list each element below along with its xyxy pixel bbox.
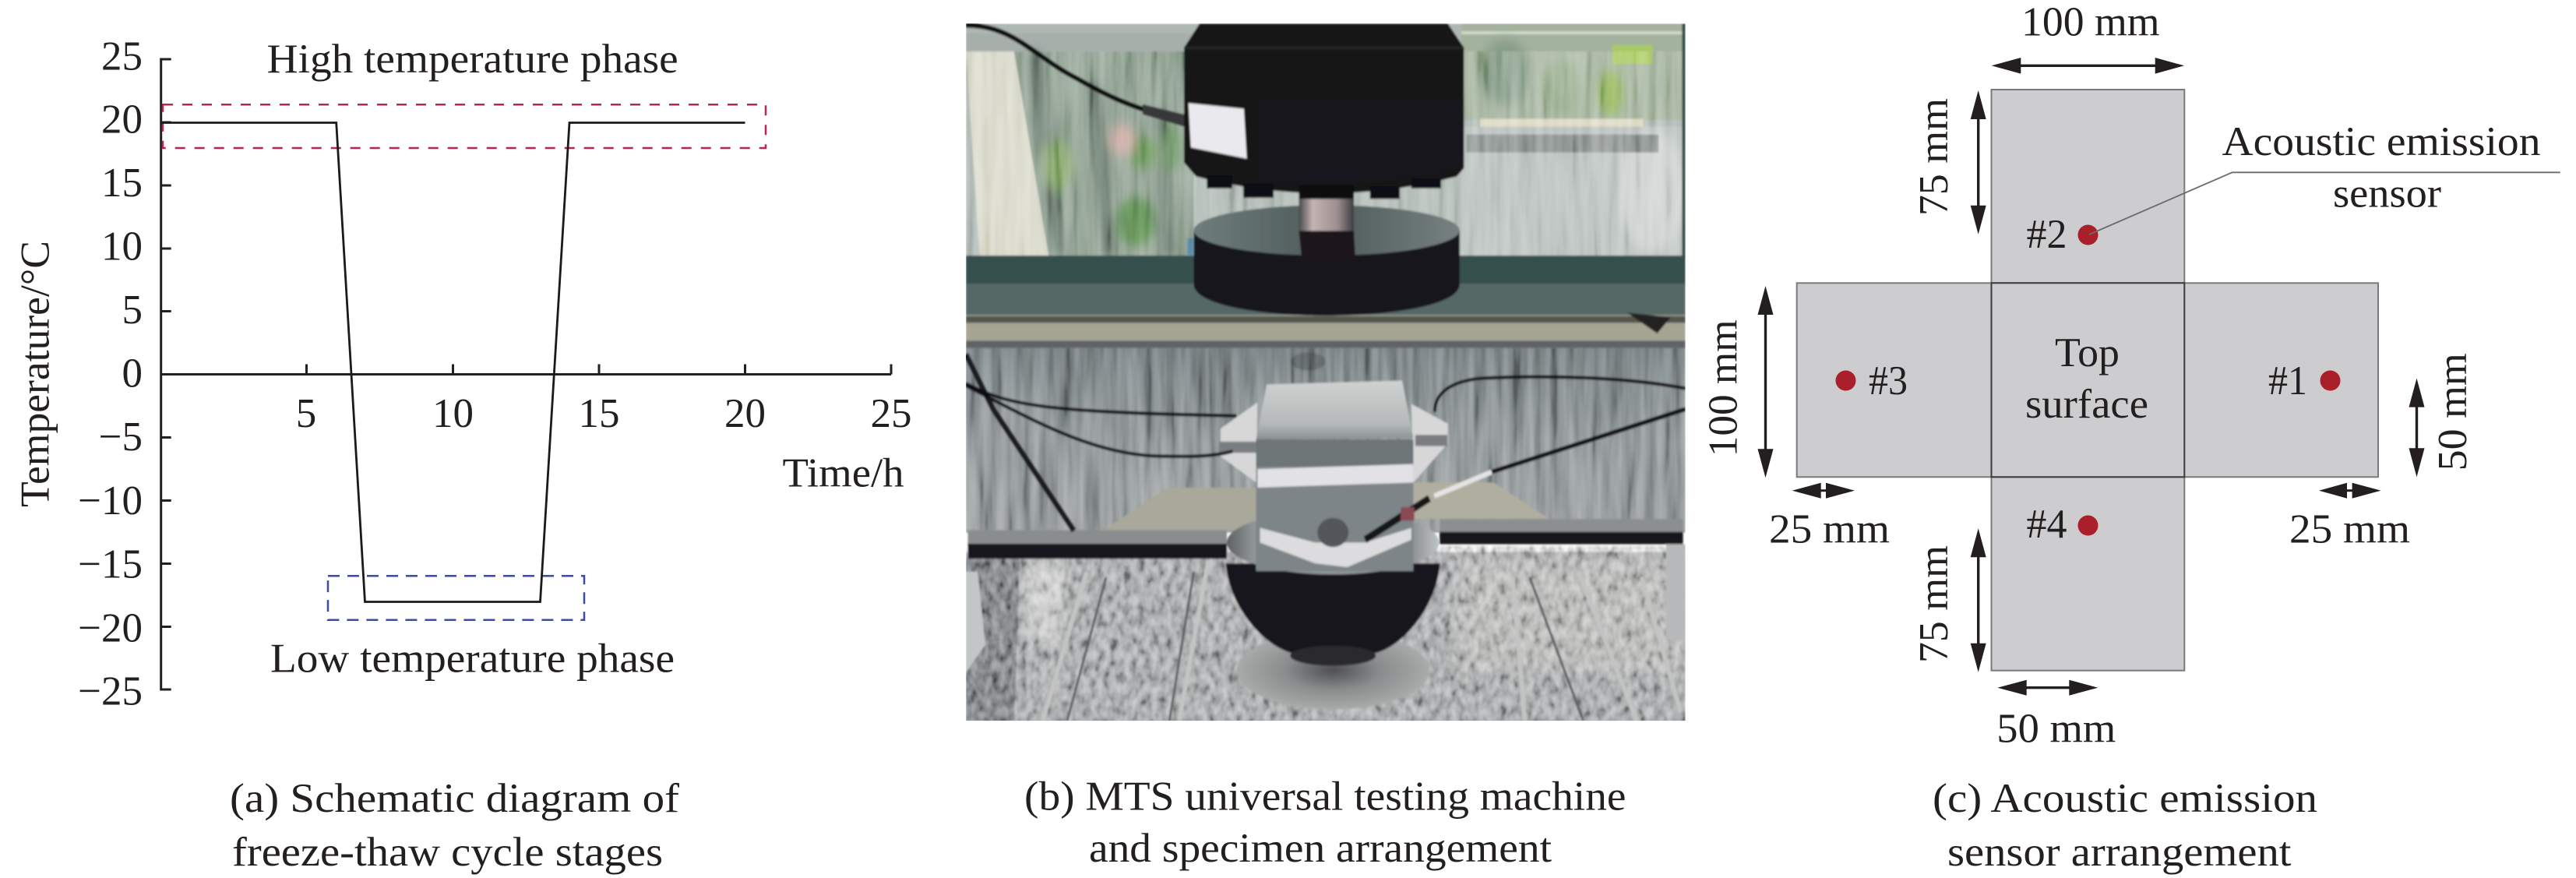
- sensor number labels: #3: [1869, 358, 1908, 404]
- top surface label: surface: [2025, 382, 2148, 427]
- top surface label: [2025, 330, 2148, 427]
- x-axis tick labels: 5: [296, 391, 316, 436]
- y-axis tick labels: 20: [101, 97, 143, 142]
- y-axis tick labels: 25: [101, 34, 143, 79]
- floor: [966, 552, 1686, 723]
- acoustic emission sensor label: sensor: [2333, 171, 2441, 217]
- y-axis tick labels: 5: [122, 287, 143, 333]
- caption (c): (c) Acoustic emission: [1933, 776, 2317, 821]
- chart axes: [161, 58, 891, 690]
- x-axis tick labels: 20: [724, 391, 766, 436]
- arrow: 100 mm top: [1992, 58, 2184, 74]
- dimension labels: 75 mm: [1912, 98, 1957, 216]
- dimension labels: 50 mm: [2430, 353, 2476, 471]
- arrow: 50 mm bottom: [1997, 680, 2098, 696]
- caption (c): [1933, 776, 2317, 875]
- x-axis tick labels: [296, 391, 911, 436]
- caption (c): sensor arrangement: [1947, 830, 2292, 875]
- photo: [966, 23, 1686, 723]
- dimension labels: 25 mm: [1769, 507, 1890, 552]
- sensor leader line: [2089, 172, 2560, 234]
- dimension labels: 50 mm: [1996, 707, 2116, 752]
- y-axis tick labels: 10: [101, 224, 143, 270]
- caption (a): [230, 776, 679, 875]
- y-axis tick labels: 0: [122, 351, 143, 396]
- panel: (a) freeze-thaw chart: [12, 34, 911, 875]
- dimension labels: [1701, 0, 2476, 752]
- specimen: [1256, 380, 1413, 439]
- temperature curve: [161, 123, 745, 601]
- y-axis tick labels: −5: [99, 414, 143, 460]
- arrow: 75 mm bottom: [1971, 528, 1986, 672]
- y-axis tick labels: −20: [78, 606, 143, 651]
- dimension labels: 25 mm: [2289, 507, 2410, 552]
- x-axis tick labels: 10: [432, 391, 474, 436]
- platen: [1193, 230, 1460, 316]
- y-axis tick labels: −10: [78, 478, 143, 524]
- upper machine: [1184, 23, 1464, 193]
- machine base: [1236, 640, 1429, 711]
- low temperature highlight box: [328, 576, 584, 620]
- sensor number labels: [1869, 212, 2307, 547]
- y-axis title: Temperature/°C: [12, 241, 58, 507]
- caption (b): (b) MTS universal testing machine: [1024, 774, 1626, 820]
- dark beam: [967, 531, 1227, 544]
- x-axis title: Time/h: [782, 450, 904, 495]
- window frame and sill: [966, 256, 1686, 284]
- y-axis tick labels: 15: [101, 160, 143, 206]
- x-axis tick labels: 25: [871, 391, 911, 436]
- caption (a): (a) Schematic diagram of: [230, 776, 679, 821]
- arrow: 50 mm right: [2409, 379, 2424, 477]
- dimension labels: 100 mm: [2021, 0, 2159, 45]
- panel: (c) sensor arrangement diagram: [1701, 0, 2560, 875]
- top surface label: Top: [2055, 330, 2120, 376]
- high temperature highlight box: [163, 104, 766, 148]
- arrow: 25 mm left: [1792, 483, 1855, 499]
- arrow: 100 mm left: [1757, 286, 1773, 478]
- label: high temperature phase: High temperature phase: [267, 37, 678, 82]
- window glass: [966, 23, 1686, 265]
- dimension labels: 100 mm: [1701, 319, 1746, 457]
- sensor number labels: #4: [2027, 502, 2067, 547]
- brackets: [1221, 403, 1257, 482]
- sensor dots: [1835, 224, 2340, 536]
- arrow: 25 mm right: [2319, 483, 2381, 499]
- caption (b): [1024, 774, 1626, 871]
- sensor number labels: #2: [2027, 212, 2067, 257]
- x-axis tick labels: 15: [578, 391, 620, 436]
- concrete wall: [966, 347, 1686, 532]
- y-axis tick labels: [78, 34, 143, 714]
- dimension labels: 75 mm: [1912, 545, 1957, 663]
- sensor number labels: #1: [2268, 358, 2307, 404]
- y-axis tick labels: −15: [78, 542, 143, 587]
- y-axis tick labels: −25: [78, 668, 143, 714]
- acoustic emission sensor label: [2222, 119, 2541, 217]
- unfolded specimen cross: [1797, 90, 2378, 671]
- cables: [966, 383, 1237, 457]
- caption (b): and specimen arrangement: [1089, 826, 1552, 871]
- arrow: 75 mm top: [1971, 90, 1986, 234]
- acoustic emission sensor label: Acoustic emission: [2222, 119, 2541, 164]
- label: low temperature phase: Low temperature phase: [270, 636, 675, 682]
- panel: (b) photo of testing machine: [966, 23, 1686, 871]
- caption (a): freeze-thaw cycle stages: [232, 830, 663, 875]
